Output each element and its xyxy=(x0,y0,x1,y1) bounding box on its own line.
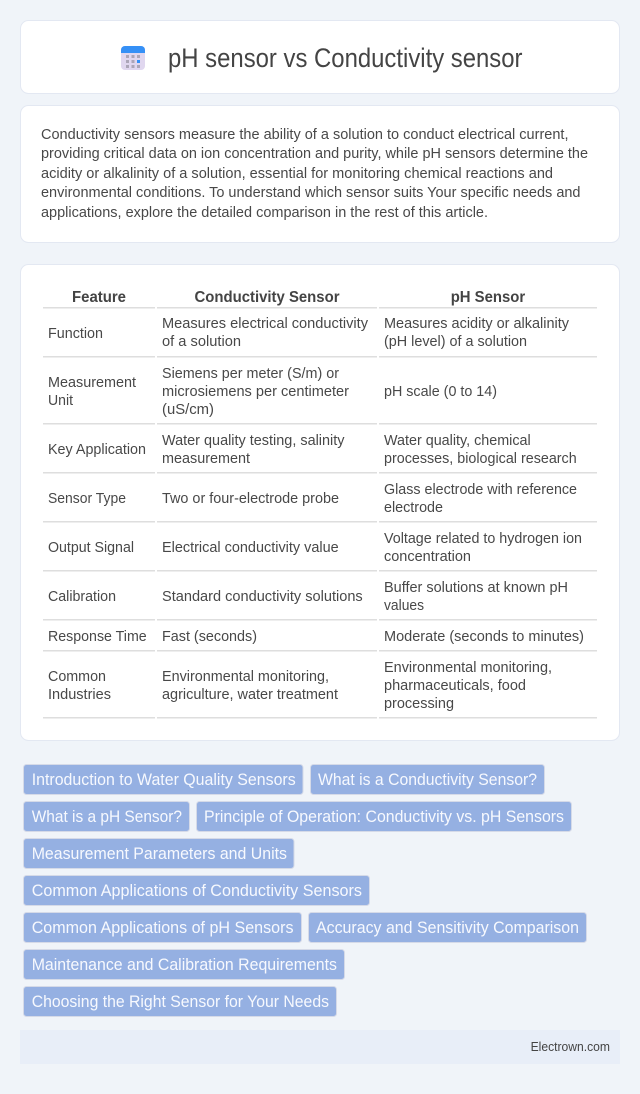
row: sensor type: Sensor Type xyxy=(48,491,126,507)
intro paragraph: Conductivity sensors measure the ability of a solution to conduct electrical current, xyxy=(41,127,568,143)
intro paragraph: providing critical data on ion concentration and purity, while pH sensors determine the xyxy=(41,146,588,162)
tag: choosing sensor xyxy=(24,986,336,1016)
row: common industries: Common xyxy=(48,669,106,685)
tag: pH applications: Common Applications of pH Sensors xyxy=(32,918,293,937)
tag: conductivity sensor xyxy=(310,764,544,794)
row: response time: Response Time xyxy=(48,629,147,645)
row: function: of a solution xyxy=(162,334,241,350)
table header: Conductivity Sensor xyxy=(194,289,340,306)
icon: calendar xyxy=(121,46,145,70)
row: function: Measures acidity or alkalinity xyxy=(384,316,570,332)
row: measurement unit: (uS/cm) xyxy=(162,402,214,418)
tag: accuracy xyxy=(308,912,586,942)
row: key application: processes, biological research xyxy=(384,451,577,467)
tag: pH applications xyxy=(24,912,302,942)
row: common industries: processing xyxy=(384,696,454,712)
row: sensor type: electrode xyxy=(384,500,443,516)
tag: measurement parameters: Measurement Parameters and Units xyxy=(32,844,287,863)
row: sensor type: Two or four-electrode probe xyxy=(162,491,339,507)
panel: introduction xyxy=(20,106,620,242)
intro paragraph: environmental conditions. To understand which sensor suits Your specific needs and xyxy=(41,185,580,201)
intro paragraph: acidity or alkalinity of a solution, essential for monitoring chemical reactions and xyxy=(41,166,553,182)
row: function: Measures electrical conductivity xyxy=(162,316,369,332)
row: function: Function xyxy=(48,326,103,342)
row: measurement unit: microsiemens per centimeter xyxy=(162,384,349,400)
panel: topic tags xyxy=(24,764,586,1016)
row: key application: Water quality, chemical xyxy=(384,433,531,449)
panel: comparison table xyxy=(20,264,620,740)
title: pH sensor vs Conductivity sensor xyxy=(168,43,523,73)
row: sensor type xyxy=(48,482,577,516)
tag: pH sensor xyxy=(24,802,190,832)
tag: choosing sensor: Choosing the Right Sensor for Your Needs xyxy=(32,992,329,1011)
table header: pH Sensor xyxy=(451,289,525,306)
row: measurement unit: Unit xyxy=(48,393,73,409)
row: measurement unit: pH scale (0 to 14) xyxy=(384,384,497,400)
row: common industries: Industries xyxy=(48,687,111,703)
row: output signal: Output Signal xyxy=(48,540,134,556)
row: output signal: Voltage related to hydrogen ion xyxy=(384,531,582,547)
row: key application: Key Application xyxy=(48,442,146,458)
tag: principle of operation xyxy=(196,802,572,832)
row: key application xyxy=(48,433,577,467)
tag: conductivity sensor: What is a Conductivity Sensor? xyxy=(318,770,537,789)
intro paragraph xyxy=(41,127,588,221)
row: calibration: Buffer solutions at known pH xyxy=(384,580,568,596)
tag: maintenance: Maintenance and Calibration Requirements xyxy=(32,955,337,974)
tag: pH sensor: What is a pH Sensor? xyxy=(32,807,182,826)
tag: accuracy: Accuracy and Sensitivity Comparison xyxy=(316,918,579,937)
panel: title card xyxy=(20,20,620,94)
footer xyxy=(20,1030,620,1064)
row: common industries xyxy=(48,660,552,712)
row: common industries: Environmental monitoring, xyxy=(384,660,552,676)
row: common industries: agriculture, water treatment xyxy=(162,687,338,703)
row: calibration: values xyxy=(384,598,424,614)
row: output signal xyxy=(48,531,582,565)
row: calibration: Standard conductivity solutions xyxy=(162,589,363,605)
row: response time: Fast (seconds) xyxy=(162,629,257,645)
tag: introduction: Introduction to Water Quality Sensors xyxy=(32,770,296,789)
row: key application: Water quality testing, salinity xyxy=(162,433,345,449)
tag: introduction xyxy=(24,764,303,794)
row: calibration xyxy=(48,580,568,614)
tag: conductivity applications: Common Applications of Conductivity Sensors xyxy=(32,881,362,900)
row: measurement unit: Measurement xyxy=(48,375,136,391)
row: output signal: concentration xyxy=(384,549,471,565)
row: function: (pH level) of a solution xyxy=(384,334,527,350)
row: function xyxy=(48,316,570,350)
row: response time: Moderate (seconds to minutes) xyxy=(384,629,584,645)
row: measurement unit: Siemens per meter (S/m) or xyxy=(162,366,339,382)
row: measurement unit xyxy=(48,366,497,418)
tag: conductivity applications xyxy=(24,876,370,906)
tag: measurement parameters xyxy=(24,838,294,868)
row: response time xyxy=(48,629,584,645)
row: sensor type: Glass electrode with reference xyxy=(384,482,577,498)
intro paragraph: applications, explore the detailed comparison in the rest of this article. xyxy=(41,205,488,221)
row: common industries: pharmaceuticals, food xyxy=(384,678,526,694)
row: output signal: Electrical conductivity value xyxy=(162,540,339,556)
row: calibration: Calibration xyxy=(48,589,116,605)
row: key application: measurement xyxy=(162,451,250,467)
footer: Electrown.com xyxy=(531,1040,610,1054)
row: common industries: Environmental monitoring, xyxy=(162,669,329,685)
table header xyxy=(72,289,525,306)
tag: principle of operation: Principle of Operation: Conductivity vs. pH Sensors xyxy=(204,807,564,826)
tag: maintenance xyxy=(24,950,344,980)
table header: Feature xyxy=(72,289,126,306)
